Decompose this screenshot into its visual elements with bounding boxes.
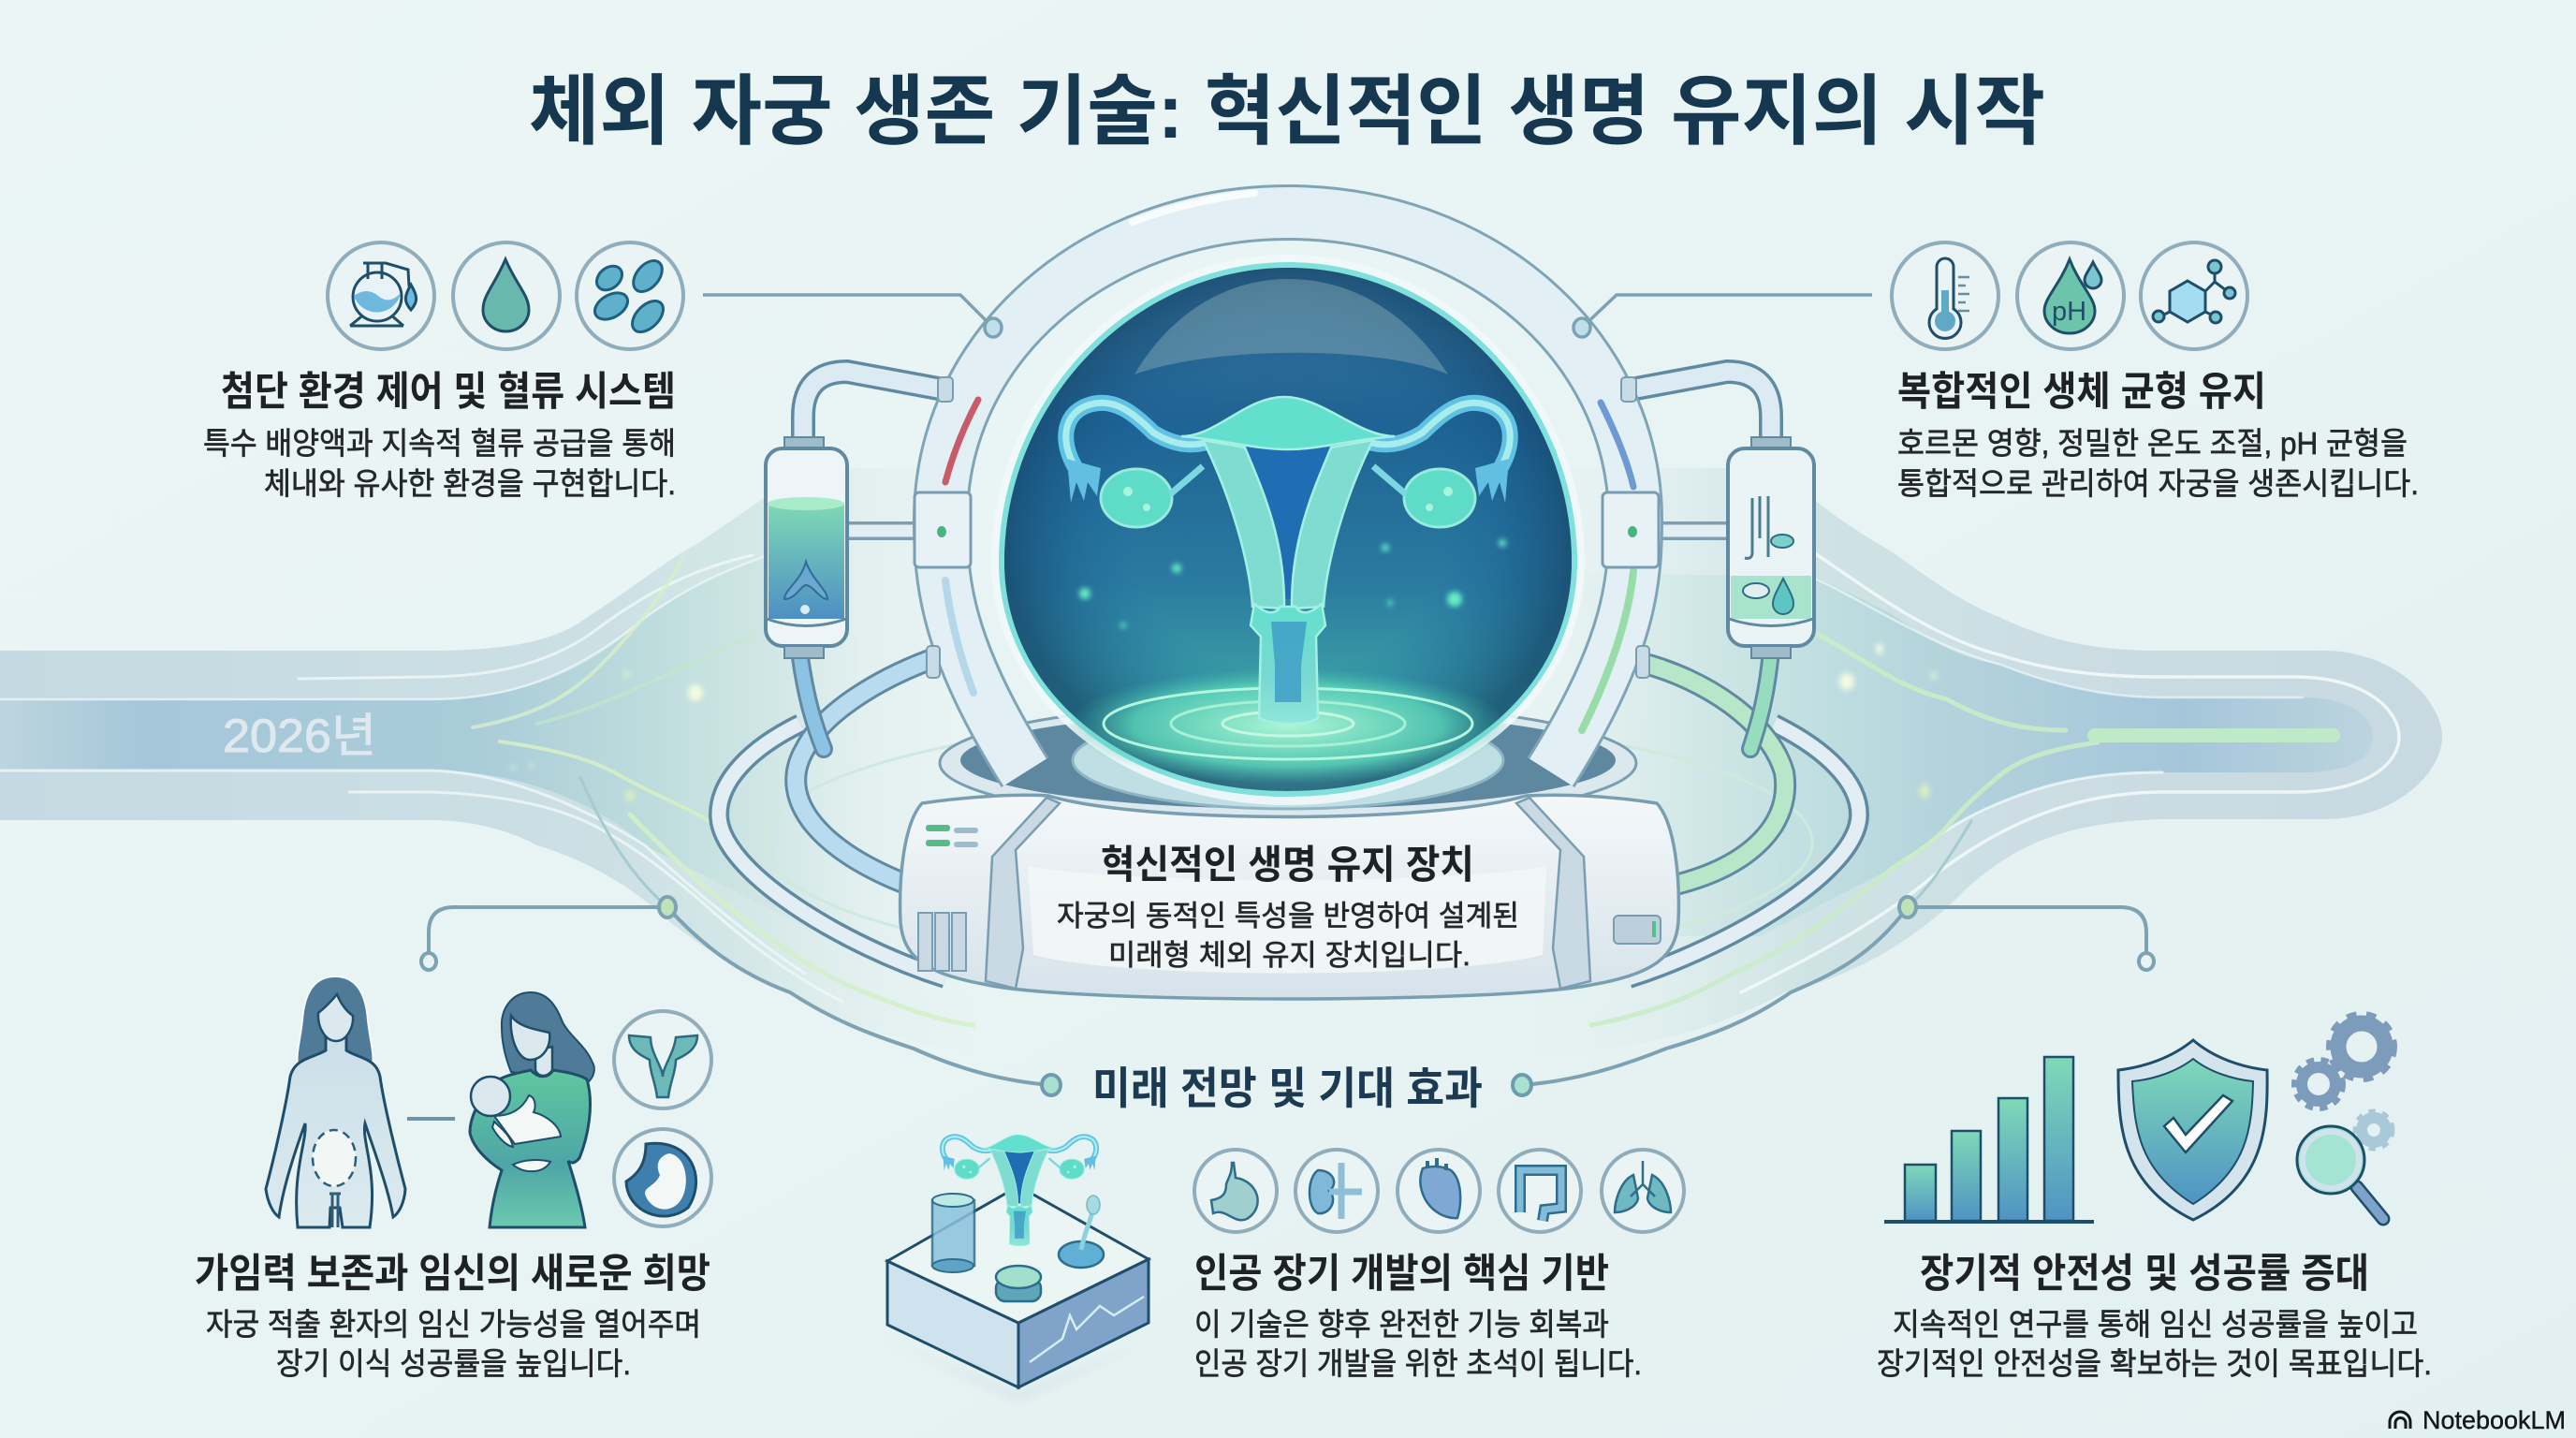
connector: upper right xyxy=(1573,295,1872,337)
description: 자궁 적출 환자의 임신 가능성을 열어주며 xyxy=(206,1307,701,1342)
status lights xyxy=(926,825,978,847)
heading: 장기적 안전성 및 성공률 증대 xyxy=(1920,1252,2369,1297)
icon: intestine xyxy=(1499,1150,1581,1232)
panel: fertility xyxy=(195,976,711,1381)
icon: shield xyxy=(2118,1040,2267,1220)
sphere chamber xyxy=(991,255,1585,805)
sphere particles xyxy=(1079,539,1506,628)
arch clamps and nodes xyxy=(915,377,1659,678)
tube: upper right xyxy=(1626,372,1771,531)
panel: artificial organs xyxy=(872,1135,1684,1400)
device text: 자궁의 동적인 특성을 반영하여 설계된 xyxy=(1057,900,1519,932)
panel: biological balance xyxy=(1892,242,2419,501)
panel: long-term safety xyxy=(1877,1016,2432,1381)
flow lines xyxy=(0,548,2399,1025)
title: 체외 자궁 생존 기술: 혁신적인 생명 유지의 시작 xyxy=(529,69,2045,154)
icon: kidney xyxy=(1295,1150,1378,1232)
description xyxy=(1877,1307,2432,1381)
heading: 인공 장기 개발의 핵심 기반 xyxy=(1194,1252,1609,1297)
connector: lower right xyxy=(1522,821,2154,1085)
icon: pH drop: pH xyxy=(2052,297,2086,327)
icon: molecule xyxy=(2141,242,2247,349)
section heading: future outlook: 미래 전망 및 기대 효과 xyxy=(1092,1064,1483,1113)
icon: lungs xyxy=(1602,1150,1684,1232)
panel: environment control xyxy=(203,242,683,501)
description xyxy=(206,1307,701,1381)
description xyxy=(203,426,676,501)
description: 이 기술은 향후 완전한 기능 회복과 xyxy=(1194,1307,1609,1342)
description: 장기적인 안전성을 확보하는 것이 목표입니다. xyxy=(1877,1346,2432,1381)
icon: cells xyxy=(577,242,683,349)
timeline end bar xyxy=(2087,728,2340,742)
uterine fundus xyxy=(1181,397,1395,449)
description: 호르몬 영향, 정밀한 온도 조절, pH 균형을 xyxy=(1897,426,2408,461)
uterine cavity xyxy=(1209,438,1367,599)
tank: right xyxy=(1728,437,1814,658)
icon: embryo xyxy=(614,1129,711,1226)
vents xyxy=(918,913,966,971)
platform probe xyxy=(1059,1196,1104,1268)
icon: gears xyxy=(2295,1016,2393,1148)
device text: 혁신적인 생명 유지 장치 xyxy=(1101,843,1474,887)
platform dish xyxy=(996,1266,1041,1301)
timeline label: 2026년: 2026년 xyxy=(223,710,376,762)
circulation tubes xyxy=(796,651,1785,885)
heading: 복합적인 생체 균형 유지 xyxy=(1897,370,2266,415)
timeline flow band xyxy=(0,468,2442,1058)
description xyxy=(1194,1307,1642,1381)
slot indicator xyxy=(1614,916,1661,944)
bar chart xyxy=(1884,1057,2094,1222)
icon: magnifier xyxy=(2297,1126,2383,1219)
icon: uterus xyxy=(614,1011,711,1108)
description: 통합적으로 관리하여 자궁을 생존시킵니다. xyxy=(1897,466,2419,501)
icon: stomach xyxy=(1194,1150,1277,1232)
right tube and ovary xyxy=(1359,403,1510,527)
tube: upper left xyxy=(803,372,948,531)
description: 지속적인 연구를 통해 임신 성공률을 높이고 xyxy=(1893,1307,2418,1342)
connector: upper left xyxy=(703,295,1002,337)
description xyxy=(1897,426,2419,501)
description: 인공 장기 개발을 위한 초석이 됩니다. xyxy=(1194,1346,1642,1381)
heading: 첨단 환경 제어 및 혈류 시스템 xyxy=(221,370,676,415)
icon: pH drop xyxy=(2017,242,2124,349)
illustration: woman without uterus xyxy=(266,976,405,1227)
pedestal collar xyxy=(940,702,1636,824)
heading: 가임력 보존과 임신의 새로운 희망 xyxy=(195,1252,710,1297)
illustration: mother and baby xyxy=(470,992,594,1227)
icon: flask xyxy=(328,242,434,349)
description: 특수 배양액과 지속적 혈류 공급을 통해 xyxy=(203,426,676,461)
uterine walls xyxy=(1203,440,1373,609)
logo: NotebookLM: NotebookLM xyxy=(2422,1406,2566,1434)
description: 체내와 유사한 환경을 구현합니다. xyxy=(264,466,676,501)
glow particles xyxy=(511,643,1938,801)
left tube and ovary xyxy=(1066,403,1217,527)
icon: heart xyxy=(1398,1150,1480,1232)
device text xyxy=(1057,843,1519,972)
tank: left xyxy=(766,437,847,658)
cervical canal xyxy=(1271,622,1307,702)
illustration: organ platform xyxy=(872,1135,1165,1400)
cervix xyxy=(1251,604,1325,724)
icon: thermometer xyxy=(1892,242,1998,349)
platform cylinder xyxy=(932,1194,974,1272)
sphere glow floor xyxy=(1068,668,1508,784)
platform uterus xyxy=(943,1135,1096,1246)
description: 장기 이식 성공률을 높입니다. xyxy=(276,1346,631,1381)
arrow dash xyxy=(407,1117,455,1121)
device text: 미래형 체외 유지 장치입니다. xyxy=(1108,939,1471,972)
glass arch xyxy=(941,193,1635,772)
icon: drop xyxy=(453,242,560,349)
uterus illustration xyxy=(1066,397,1510,724)
floor ring xyxy=(719,716,1859,978)
connector: lower left xyxy=(421,777,1051,1085)
pedestal body xyxy=(900,795,1678,999)
